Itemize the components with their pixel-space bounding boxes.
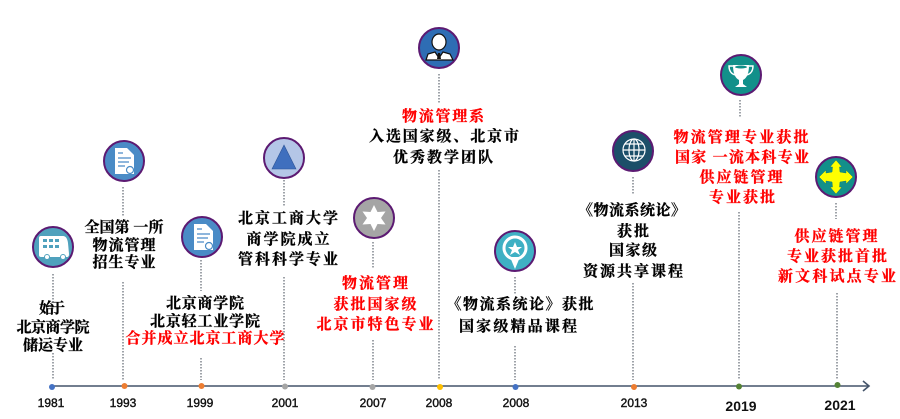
year: 2001: 2001 xyxy=(272,396,299,410)
text: 2008 team description: 优秀教学团队 xyxy=(393,148,493,166)
milestone 2021 xyxy=(778,157,896,413)
year: 2013: 2013 xyxy=(621,396,648,410)
text: 1999 description xyxy=(126,294,284,347)
text: 1993 description: 招生专业 xyxy=(92,253,156,271)
icon: person xyxy=(419,28,459,68)
text: 1981 description: 储运专业 xyxy=(23,336,83,354)
text: 1993 description: 物流管理 xyxy=(92,236,156,254)
milestone 2013 xyxy=(578,131,686,410)
text: 1999 description: 北京商学院 xyxy=(166,294,244,312)
text: 2007 description: 获批国家级 xyxy=(334,295,416,313)
text: 2021 description: 新文科试点专业 xyxy=(778,267,896,285)
milestone 2008 team xyxy=(369,28,519,410)
text: 1981 description xyxy=(16,300,90,354)
text: 2019 description: 国家 一流本科专业 xyxy=(675,148,809,166)
text: 1981 description: 北京商学院 xyxy=(16,318,90,336)
year: 2021: 2021 xyxy=(824,397,856,413)
text: 2021 description: 供应链管理 xyxy=(794,227,878,245)
text: 1981 description: 始于 xyxy=(39,300,65,317)
text: 2013 description: 《物流系统论》 xyxy=(578,201,686,219)
text: 2008 team description: 入选国家级、北京市 xyxy=(369,127,519,145)
text: 2007 description: 物流管理 xyxy=(342,274,408,292)
text: 2021 description: 专业获批首批 xyxy=(787,247,887,265)
text: 2021 description xyxy=(778,227,896,285)
text: 2008 course description xyxy=(446,295,594,335)
year: 2007: 2007 xyxy=(360,396,387,410)
text: 2007 description: 北京市特色专业 xyxy=(316,315,434,333)
icon: gear star xyxy=(354,198,394,238)
text: 2019 description: 物流管理专业获批 xyxy=(674,128,808,146)
text: 1993 description xyxy=(84,218,164,271)
icon: certificate document xyxy=(104,141,144,181)
text: 2013 description: 国家级 xyxy=(609,241,657,259)
icon: globe xyxy=(613,131,653,171)
text: 2008 course description: 《物流系统论》获批 xyxy=(446,295,594,313)
text: 2001 description: 商学院成立 xyxy=(246,230,330,248)
milestone 2001 xyxy=(238,138,338,410)
milestone 1993 xyxy=(84,141,164,410)
milestone 2007 xyxy=(316,198,434,410)
text: 1999 description: 合并成立北京工商大学 xyxy=(126,329,284,347)
icon: certificate document 2 xyxy=(182,217,222,257)
milestone 2019 xyxy=(674,55,809,414)
text: 1993 description: 全国第 一所 xyxy=(84,218,164,236)
text: 2008 team description: 物流管理系 xyxy=(402,107,485,125)
icon: triangle xyxy=(264,138,304,178)
milestone 1999 xyxy=(126,217,284,410)
year: 1999: 1999 xyxy=(187,396,214,410)
text: 2013 description: 获批 xyxy=(617,222,649,240)
year: 1993: 1993 xyxy=(110,396,137,410)
timeline axis with arrow xyxy=(53,381,869,391)
text: 2007 description xyxy=(316,274,434,333)
icon: map pin star xyxy=(495,231,535,271)
text: 2019 description: 供应链管理 xyxy=(700,168,782,186)
milestone 1981 xyxy=(16,227,90,410)
text: 2001 description: 管科科学专业 xyxy=(238,250,338,268)
text: 2001 description: 北京工商大学 xyxy=(238,209,338,227)
year: 2008 second: 2008 xyxy=(503,396,530,410)
icon: bus xyxy=(33,227,73,267)
text: 2019 description xyxy=(674,128,809,206)
text: 2008 course description: 国家级精品课程 xyxy=(459,317,577,335)
text: 2013 description xyxy=(578,201,686,280)
text: 1999 description: 北京轻工业学院 xyxy=(150,312,260,330)
year: 1981: 1981 xyxy=(38,396,65,410)
year: 2019: 2019 xyxy=(725,398,757,414)
text: 2008 team description xyxy=(369,107,519,166)
text: 2013 description: 资源共享课程 xyxy=(583,262,683,280)
icon: trophy xyxy=(721,55,761,95)
icon: yellow four-way arrows xyxy=(816,157,856,197)
text: 2001 description xyxy=(238,209,338,268)
text: 2019 description: 专业获批 xyxy=(709,188,775,206)
year: 2008: 2008 xyxy=(426,396,453,410)
milestone 2008 course xyxy=(446,231,594,410)
